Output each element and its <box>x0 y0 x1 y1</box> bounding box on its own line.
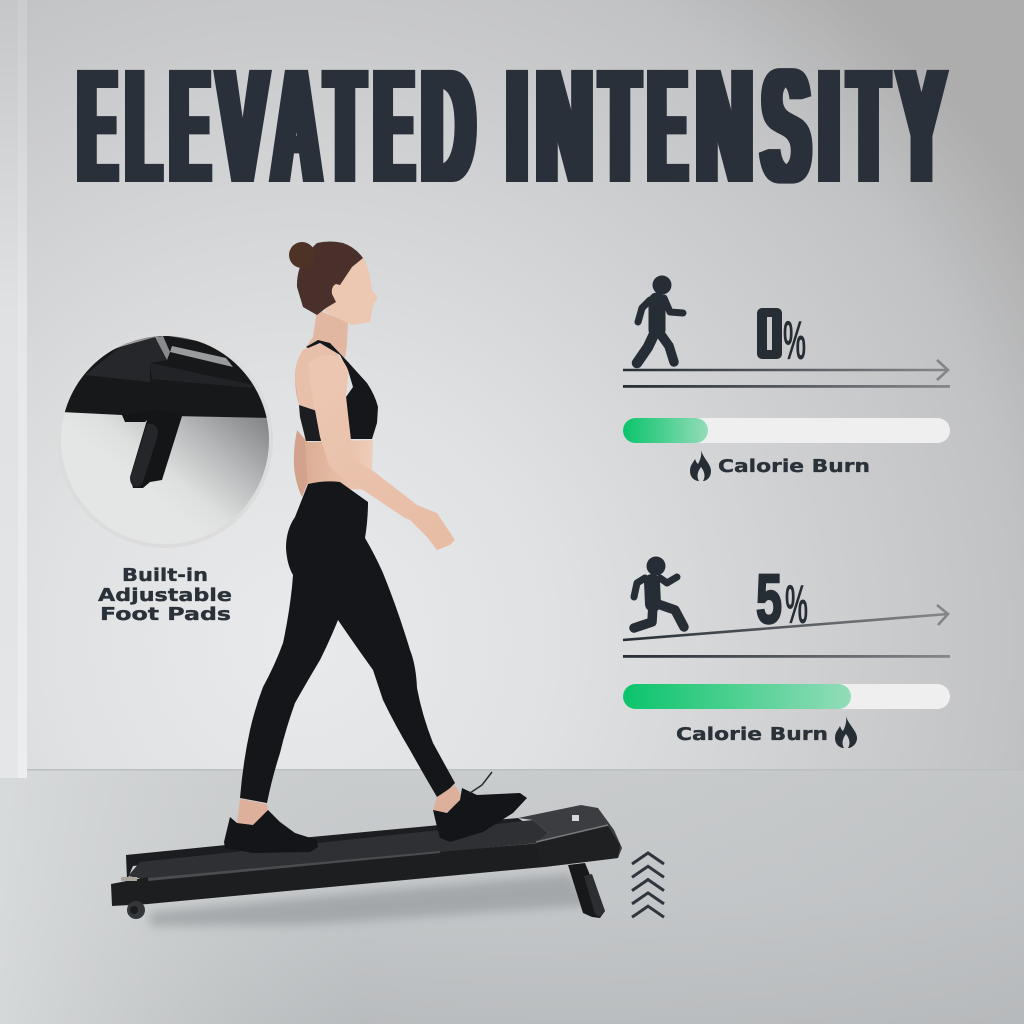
front arm <box>308 355 455 550</box>
adjustable foot pad <box>122 410 183 488</box>
title: I <box>819 34 839 217</box>
treadmill <box>111 805 622 919</box>
icon: upward chevrons <box>632 853 664 917</box>
title: L <box>128 34 160 217</box>
title: I <box>507 34 527 217</box>
panel: 5% incline <box>623 556 950 748</box>
icon: running person <box>634 556 684 628</box>
title: E <box>375 34 412 217</box>
belt <box>128 820 548 880</box>
title: E <box>79 34 115 217</box>
title: E <box>171 34 208 217</box>
base line <box>623 385 950 388</box>
panel: 0% incline <box>623 276 950 481</box>
title: T <box>850 34 887 217</box>
percent label 5%: 5 <box>756 560 782 638</box>
neck <box>306 310 348 358</box>
end block <box>111 877 149 906</box>
ankles <box>237 799 268 825</box>
caption: built-in adjustable foot pads <box>98 566 232 625</box>
icon: flame <box>690 450 711 481</box>
title: T <box>602 34 638 217</box>
panel: 0% incline: % <box>783 309 806 371</box>
title: E <box>649 34 685 217</box>
wheel <box>127 901 145 919</box>
front shoe <box>433 788 527 842</box>
title: A <box>273 34 320 217</box>
incline arrow <box>623 605 948 640</box>
text: Y <box>898 34 944 217</box>
woman <box>224 242 527 853</box>
title <box>79 34 944 217</box>
icon: flame <box>835 716 857 748</box>
title: S <box>763 34 809 217</box>
rear support foot <box>568 863 605 918</box>
title: V <box>219 34 266 217</box>
title: T <box>327 34 363 217</box>
title: D <box>422 34 474 217</box>
hair bun <box>289 242 315 268</box>
rear shoe <box>224 810 318 853</box>
far rail <box>126 818 530 880</box>
sports bra <box>306 340 378 439</box>
panel: 5% incline: % <box>785 573 808 635</box>
panel: foot pad inset <box>57 332 273 548</box>
calorie bar <box>623 684 950 709</box>
leggings <box>240 481 455 803</box>
midriff and back <box>295 350 373 490</box>
flat arrow <box>623 360 948 380</box>
floor shadow under treadmill <box>150 874 592 926</box>
console <box>518 805 622 867</box>
inset circle border <box>57 332 273 548</box>
title: N <box>537 34 592 217</box>
title: N <box>697 34 752 217</box>
side frame <box>148 843 544 904</box>
photo: woman walking on incline treadmill <box>111 242 622 926</box>
icon: walking person <box>637 276 683 363</box>
caption: built-in adjustable foot pads: Foot Pads <box>100 605 231 625</box>
base line <box>623 655 950 658</box>
caption: built-in adjustable foot pads: Adjustable <box>98 586 232 606</box>
label: calorie burn: Calorie Burn <box>718 456 870 477</box>
head face <box>325 258 378 325</box>
rear arm <box>294 430 310 497</box>
percent label 0% <box>757 308 806 371</box>
calorie bar <box>623 418 950 443</box>
caption: built-in adjustable foot pads: Built-in <box>122 566 208 586</box>
label: calorie burn: Calorie Burn <box>676 724 828 745</box>
inset photo <box>57 332 273 548</box>
hair <box>297 242 363 315</box>
